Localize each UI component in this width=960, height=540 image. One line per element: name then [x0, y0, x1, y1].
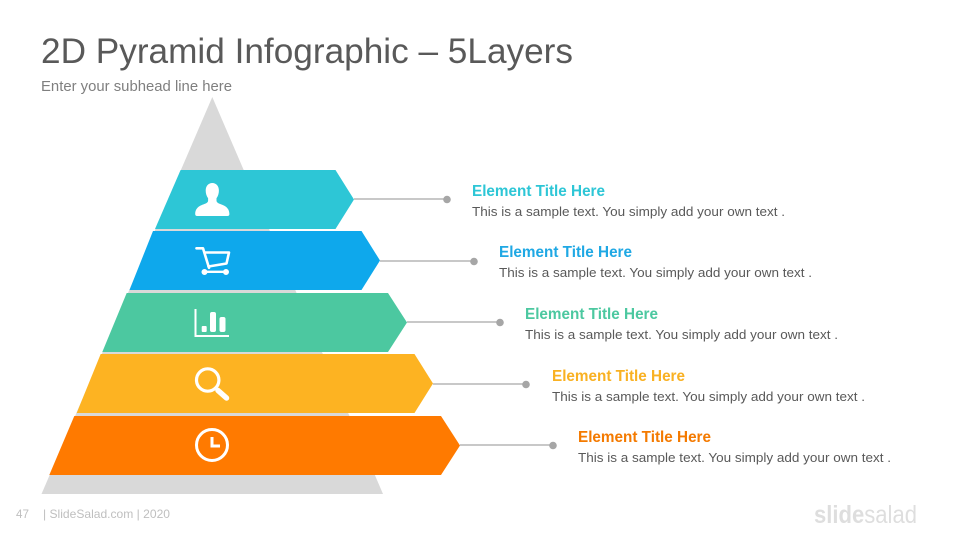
logo: slidesalad	[814, 501, 917, 529]
connector 3	[407, 319, 504, 326]
pyramid background	[42, 97, 383, 494]
text block 4	[552, 368, 865, 404]
text block 5	[578, 429, 891, 465]
layer 4: yellow band with magnifier icon	[77, 354, 433, 413]
page number: 47	[16, 507, 29, 521]
text block 5: This is a sample text. You simply add your own text .	[578, 451, 891, 465]
icon: shopping cart	[196, 248, 229, 274]
subhead: Enter your subhead line here	[41, 79, 232, 95]
text block 1: This is a sample text. You simply add your own text .	[472, 205, 785, 219]
text block 2: Element Title Here	[499, 244, 632, 261]
icon: clock	[196, 430, 228, 460]
text block 3: This is a sample text. You simply add your own text .	[525, 328, 838, 342]
text block 4: This is a sample text. You simply add your own text .	[552, 390, 865, 404]
text block 1	[472, 183, 785, 219]
connector 4	[433, 381, 530, 388]
layer 5: orange band with clock icon	[49, 416, 460, 475]
text block 2: This is a sample text. You simply add your own text .	[499, 266, 812, 280]
connector 1	[354, 196, 451, 203]
icon: magnifier	[196, 369, 226, 398]
connector 2	[380, 258, 478, 265]
text block 3	[525, 306, 838, 342]
layer 2: blue band with cart icon	[130, 231, 380, 290]
layer 3: green band with chart icon	[102, 293, 407, 352]
icon: person	[195, 183, 229, 216]
icon: bar chart	[196, 309, 229, 336]
footer text: | SlideSalad.com | 2020	[43, 507, 170, 521]
connector 5	[460, 442, 557, 449]
text block 5: Element Title Here	[578, 429, 711, 446]
text block 2	[499, 244, 812, 280]
title: 2D Pyramid Infographic – 5Layers	[41, 32, 573, 71]
text block 3: Element Title Here	[525, 306, 658, 323]
text block 1: Element Title Here	[472, 183, 605, 200]
text block 4: Element Title Here	[552, 368, 685, 385]
layer 1: teal band with person icon	[155, 170, 354, 229]
